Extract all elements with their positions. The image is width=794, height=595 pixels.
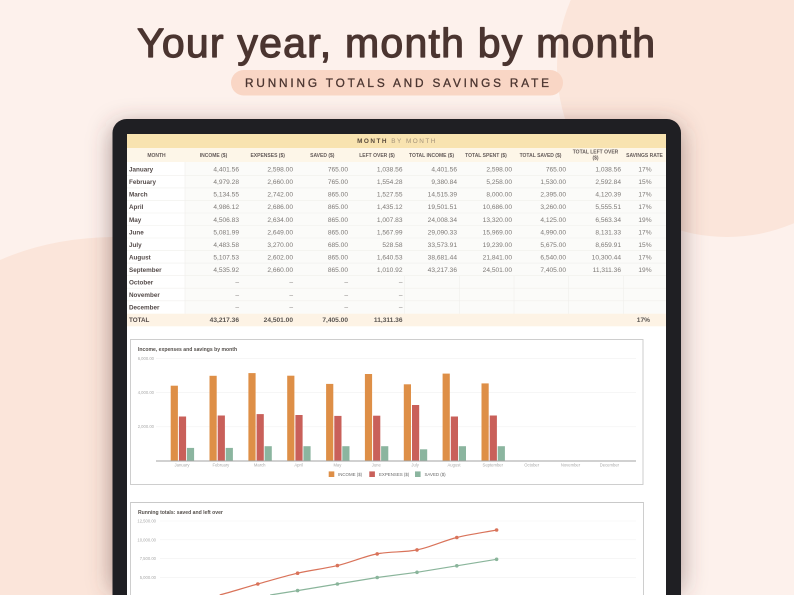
row: February: 765.00 [328, 179, 348, 186]
row: August: 865.00 [328, 254, 348, 261]
table header row: INCOME ($) [200, 153, 228, 159]
row: total [127, 314, 666, 326]
row: July: 528.58 [382, 242, 403, 249]
line chart title: Running totals: saved and left over [138, 510, 223, 516]
x axis month labels: October [524, 462, 540, 468]
expenses bars [179, 405, 497, 461]
row: total: 7,405.00 [322, 317, 348, 324]
row: February: 4,979.28 [213, 179, 239, 186]
table header row [127, 148, 666, 162]
x axis month labels: December [600, 462, 620, 468]
row: December: – [344, 305, 348, 312]
x axis month labels: April [294, 462, 303, 468]
row: September: 1,010.92 [377, 267, 403, 274]
x axis month labels: March [254, 462, 266, 468]
row: July: 33,573.91 [428, 242, 457, 249]
table header row: TOTAL SAVED ($) [520, 153, 562, 159]
row: November: – [344, 292, 348, 299]
row: March: 1,527.55 [377, 192, 403, 199]
row: November: – [399, 292, 403, 299]
row: December: – [235, 305, 239, 312]
row: January: 1,038.56 [595, 167, 621, 174]
table banner: MONTH BY MONTH [357, 138, 437, 145]
row: December: December [129, 305, 160, 312]
row: June: 29,090.33 [428, 229, 457, 236]
row: August [129, 254, 652, 261]
table header row: ($) [592, 156, 599, 162]
table header row: TOTAL SPENT ($) [465, 153, 507, 159]
row: May: May [129, 217, 142, 224]
row: May: 4,506.83 [213, 217, 239, 224]
row: January: 1,038.56 [377, 167, 403, 174]
row: January: January [129, 167, 154, 174]
row: February: February [129, 179, 156, 186]
x axis month labels: September [483, 462, 504, 468]
row: July: 15% [638, 242, 652, 249]
bar chart title: Income, expenses and savings by month [138, 347, 237, 353]
row: March: 14,515.39 [428, 192, 457, 199]
row: April: 10,686.00 [483, 204, 512, 211]
table header row: TOTAL LEFT OVER [573, 150, 619, 156]
row: July: 4,483.58 [213, 242, 239, 249]
row: January [129, 167, 652, 174]
row: June: 865.00 [328, 229, 348, 236]
row: total: 43,217.36 [210, 317, 239, 324]
row: August: 21,841.00 [483, 254, 512, 261]
line chart y axis labels: 7,500.00 [140, 556, 157, 561]
tablet frame [112, 119, 681, 595]
row: September: 19% [638, 267, 652, 274]
row: April: 5,555.51 [595, 204, 621, 211]
line: total saved [270, 558, 498, 595]
chart legend [329, 471, 446, 477]
x axis month labels: July [411, 462, 420, 468]
row: September: 7,405.00 [540, 267, 566, 274]
income bars [171, 373, 489, 461]
x axis month labels: June [372, 462, 382, 468]
row: February: 9,380.84 [431, 179, 457, 186]
row: June: 2,649.00 [267, 229, 293, 236]
line chart y axis labels: 10,000.00 [137, 537, 157, 542]
panel: line chart running totals [130, 502, 644, 595]
row: June: 1,567.99 [377, 229, 403, 236]
row: June [129, 229, 652, 236]
row: April: 2,686.00 [267, 204, 293, 211]
row: January: 2,598.00 [267, 167, 293, 174]
x axis month labels: February [213, 462, 230, 468]
row: May: 1,007.83 [377, 217, 403, 224]
row: July: 8,659.91 [595, 242, 621, 249]
line chart y axis labels: 5,000.00 [140, 575, 157, 580]
row: July: 19,239.00 [483, 242, 512, 249]
y axis labels [138, 356, 155, 429]
row: November: – [289, 292, 293, 299]
row: July: 685.00 [328, 242, 348, 249]
row: total: 11,311.36 [374, 317, 403, 324]
row: July: 3,270.00 [267, 242, 293, 249]
table header row: LEFT OVER ($) [359, 153, 395, 159]
row: June: 5,081.99 [213, 229, 239, 236]
row: April: 1,435.12 [377, 204, 403, 211]
table header row: TOTAL INCOME ($) [409, 153, 454, 159]
row: December: – [399, 305, 403, 312]
row: January: 4,401.56 [213, 167, 239, 174]
y axis labels: 4,000.00 [138, 390, 155, 395]
table header row: SAVED ($) [310, 153, 335, 159]
subtitle pill [231, 70, 563, 96]
row: March [129, 192, 652, 199]
row: March: 17% [638, 192, 652, 199]
row: May: 6,563.34 [595, 217, 621, 224]
row: January: 4,401.56 [431, 167, 457, 174]
row: April: 17% [638, 204, 652, 211]
row: June: 17% [638, 229, 652, 236]
x axis month labels: August [447, 462, 461, 468]
row: May: 19% [638, 217, 652, 224]
row: April: April [129, 204, 144, 211]
row: April [129, 204, 652, 211]
row: March: 865.00 [328, 192, 348, 199]
x axis month labels: January [175, 462, 190, 468]
row: September: September [129, 267, 162, 274]
y axis labels: 2,000.00 [138, 424, 155, 429]
row: April: 865.00 [328, 204, 348, 211]
row: June: 15,969.00 [483, 229, 512, 236]
line chart y axis labels [137, 518, 157, 580]
row: October: – [235, 280, 239, 286]
row: March: 2,395.00 [540, 192, 566, 199]
row: May: 13,320.00 [483, 217, 512, 224]
row: September: 11,311.36 [593, 267, 621, 274]
line: total left over [220, 528, 498, 595]
row: November: – [235, 292, 239, 299]
row: October: – [399, 280, 403, 286]
saved bars [187, 446, 505, 461]
row: January: 17% [638, 167, 652, 174]
table header row: EXPENSES ($) [250, 153, 285, 159]
row: April: 19,501.51 [428, 204, 457, 211]
row: February: 1,530.00 [540, 179, 566, 186]
row: September: 865.00 [328, 267, 348, 274]
title: Your year, month by month [137, 20, 655, 66]
row: May: 24,008.34 [428, 217, 457, 224]
row: January: 2,598.00 [486, 167, 512, 174]
row: February: 2,660.00 [267, 179, 293, 186]
row: January: 765.00 [328, 167, 348, 174]
row: June: June [129, 229, 144, 236]
row: March: 8,000.00 [486, 192, 512, 199]
row: December [129, 305, 403, 312]
row: total: 24,501.00 [264, 317, 293, 324]
line chart y axis labels: 12,500.00 [137, 518, 157, 524]
row: November [129, 292, 403, 299]
row: August: August [129, 254, 152, 261]
row: July [129, 242, 652, 249]
row: March: 2,742.00 [267, 192, 293, 199]
row: September [129, 267, 652, 274]
row: August: 6,540.00 [540, 254, 566, 261]
row: total: 17% [637, 317, 650, 324]
row: May [129, 217, 652, 224]
row: June: 8,131.33 [595, 229, 621, 236]
table header row: SAVINGS RATE [626, 153, 664, 159]
row: August: 2,602.00 [267, 254, 293, 261]
row: April: 4,986.12 [213, 204, 239, 211]
panel: month by month table [127, 134, 666, 326]
panel: bar chart income, expenses and savings [130, 340, 643, 484]
row: October: – [289, 280, 293, 286]
row: July: July [129, 242, 142, 249]
row: May: 4,125.00 [540, 217, 566, 224]
x axis month labels: November [561, 462, 581, 468]
row: April: 3,260.00 [540, 204, 566, 211]
row: May: 865.00 [328, 217, 348, 224]
row: March: March [129, 192, 148, 199]
row: September: 24,501.00 [483, 267, 512, 274]
row: June: 4,990.00 [540, 229, 566, 236]
row: September: 2,660.00 [267, 267, 293, 274]
row: January: 765.00 [546, 167, 566, 174]
row: August: 1,640.53 [377, 254, 403, 261]
y axis labels: 6,000.00 [138, 356, 155, 361]
row: August: 17% [638, 254, 652, 261]
row: February: 2,592.84 [595, 179, 621, 186]
row: November: November [129, 292, 160, 299]
chart legend: SAVED ($) [424, 472, 446, 477]
row: September: 43,217.36 [428, 267, 457, 274]
row: March: 4,120.39 [595, 192, 621, 199]
row: February: 15% [638, 179, 652, 186]
row: February: 1,554.28 [377, 179, 403, 186]
row: February: 5,258.00 [486, 179, 512, 186]
row: August: 38,681.44 [428, 254, 457, 261]
table header row: MONTH [147, 153, 166, 159]
row: October [129, 280, 403, 286]
x axis month labels: May [333, 462, 342, 468]
chart legend: EXPENSES ($) [379, 472, 410, 477]
row: August: 5,107.53 [213, 254, 239, 261]
chart legend: INCOME ($) [338, 472, 363, 477]
row: December: – [289, 305, 293, 312]
row: February [129, 179, 652, 186]
row: October: October [129, 280, 154, 286]
row: July: 5,675.00 [540, 242, 566, 249]
row: May: 2,634.00 [267, 217, 293, 224]
row: March: 5,134.55 [213, 192, 239, 199]
row: total: TOTAL [129, 317, 150, 324]
subtitle pill: RUNNING TOTALS AND SAVINGS RATE [245, 76, 549, 90]
row: September: 4,535.92 [213, 267, 239, 274]
row: October: – [344, 280, 348, 286]
table banner [127, 134, 666, 148]
row: August: 10,300.44 [592, 254, 621, 261]
x axis month labels [175, 462, 620, 468]
